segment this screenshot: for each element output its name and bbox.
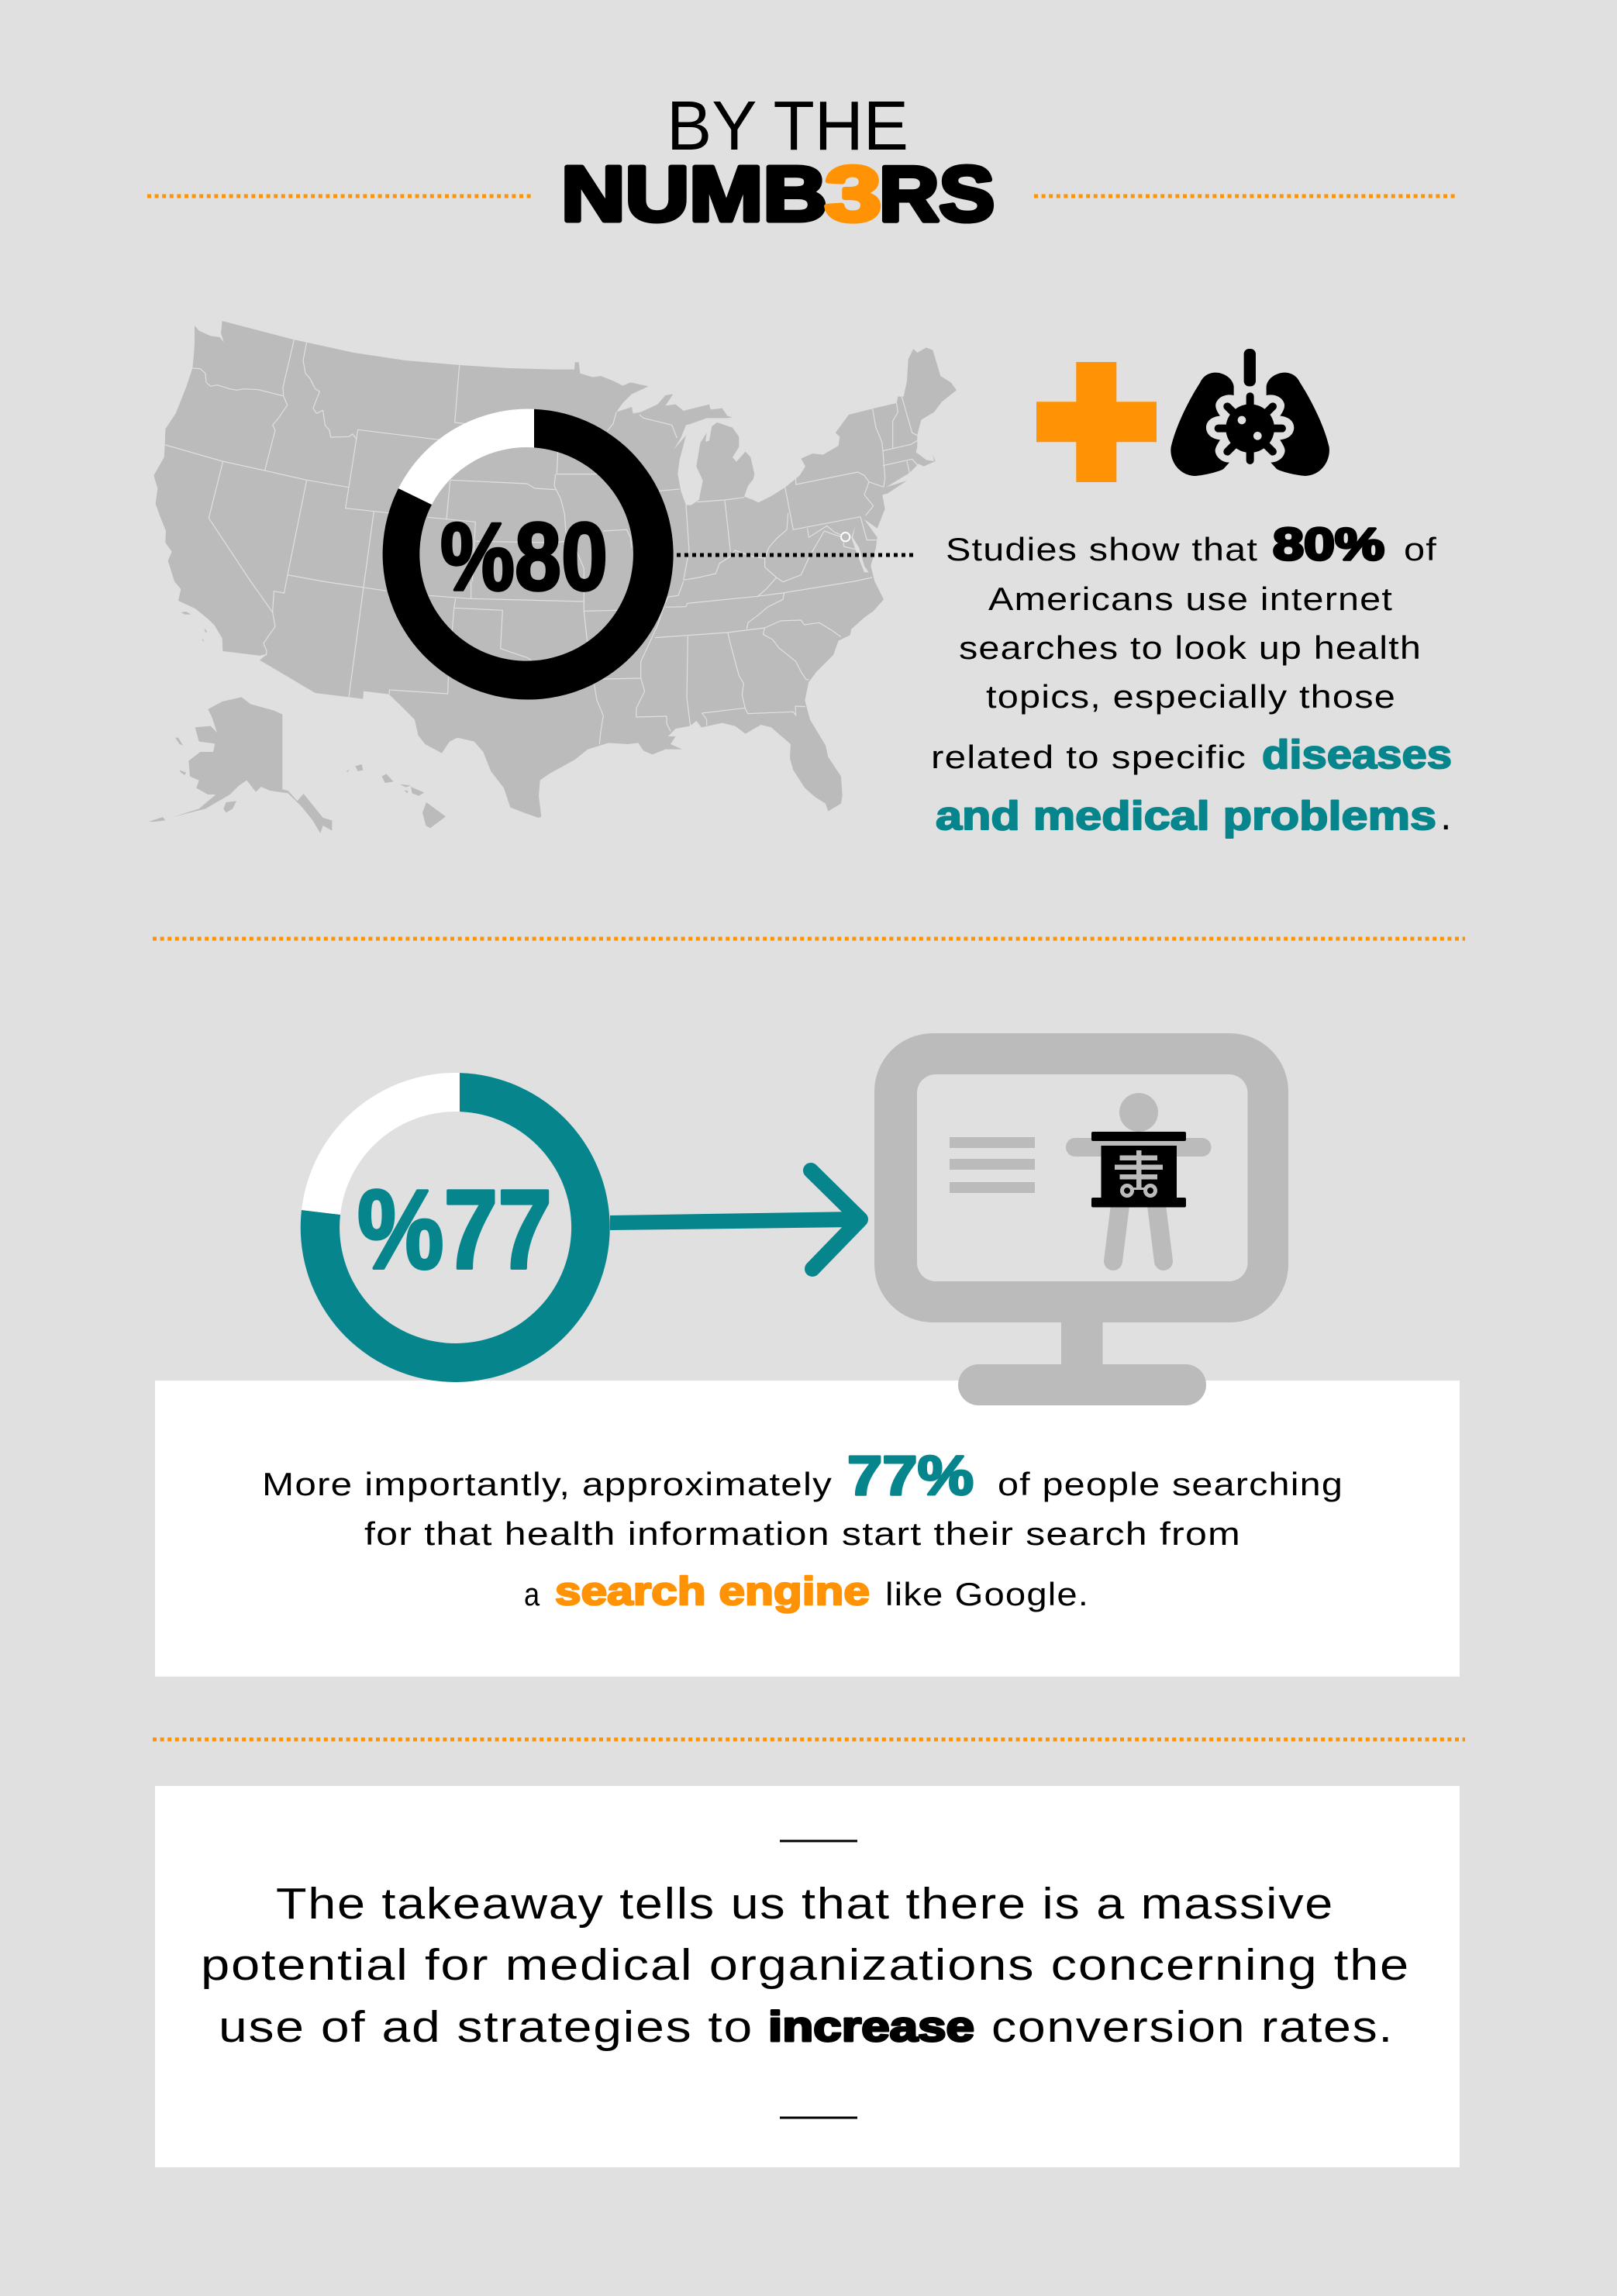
takeaway text: conversion rates. <box>991 2002 1394 2052</box>
text block: 77% statistic: like Google. <box>885 1576 1089 1612</box>
donut chart: 77%: %77 <box>357 1167 552 1292</box>
title: RS <box>879 150 995 237</box>
text block: 80% statistic: diseases <box>1262 733 1452 777</box>
text block: 77% statistic <box>262 1446 1343 1613</box>
icon: Washington DC marker <box>841 533 850 541</box>
monitor stand <box>958 1322 1206 1405</box>
icon: lungs with virus <box>1171 349 1329 476</box>
title <box>147 88 1455 237</box>
takeaway text: potential for medical organizations concerning the <box>201 1940 1410 1990</box>
white panel: takeaway <box>155 1786 1460 2167</box>
Alaska <box>149 697 332 833</box>
Chesapeake Bay <box>851 526 869 572</box>
dotted leader line <box>677 553 913 557</box>
donut chart: 77% <box>301 1073 610 1382</box>
title: 3 <box>825 150 881 237</box>
text block: 77% statistic: More importantly, approximately <box>262 1466 833 1502</box>
white panel: search engine statistic <box>155 1381 1460 1677</box>
text lines <box>950 1137 1035 1193</box>
icon: orange medical cross <box>1036 362 1157 482</box>
text block: 80% statistic: searches to look up health <box>959 629 1422 666</box>
text block: 80% statistic: . <box>1440 794 1451 839</box>
text block: 80% statistic: and medical problems <box>936 794 1436 839</box>
Hawaii <box>346 764 446 828</box>
map of the United States <box>149 321 957 833</box>
text block: 77% statistic: search engine <box>555 1569 870 1613</box>
takeaway text: increase <box>768 2002 974 2050</box>
text block: 77% statistic: for that health information start their search from <box>364 1515 1241 1552</box>
state borders <box>165 340 920 744</box>
takeaway text: The takeaway tells us that there is a massive <box>276 1879 1334 1929</box>
California islands <box>181 612 207 641</box>
icon: monitor with x-ray figure <box>874 1033 1288 1405</box>
title: NUMB <box>561 150 827 237</box>
text block: 80% statistic: Americans use internet <box>988 581 1393 617</box>
text block: 80% statistic: Studies show that <box>946 531 1258 567</box>
monitor frame <box>874 1033 1288 1322</box>
text block: 77% statistic: a <box>524 1576 540 1612</box>
x-ray figure <box>1066 1093 1211 1261</box>
takeaway text <box>201 1840 1410 2119</box>
text block: 80% statistic <box>931 519 1452 839</box>
donut chart: 80%: %80 <box>440 504 608 611</box>
donut chart: 80% <box>383 409 674 700</box>
text block: 77% statistic: 77% <box>847 1446 974 1507</box>
text block: 77% statistic: of people searching <box>998 1466 1343 1502</box>
text block: 80% statistic: related to specific <box>931 739 1246 775</box>
title: BY THE <box>667 88 908 165</box>
takeaway text: use of ad strategies to <box>219 2002 753 2052</box>
contiguous states <box>153 321 957 818</box>
text block: 80% statistic: 80% <box>1273 519 1384 570</box>
arrow <box>610 1170 860 1269</box>
text block: 80% statistic: of <box>1404 531 1437 567</box>
text block: 80% statistic: topics, especially those <box>986 678 1396 715</box>
